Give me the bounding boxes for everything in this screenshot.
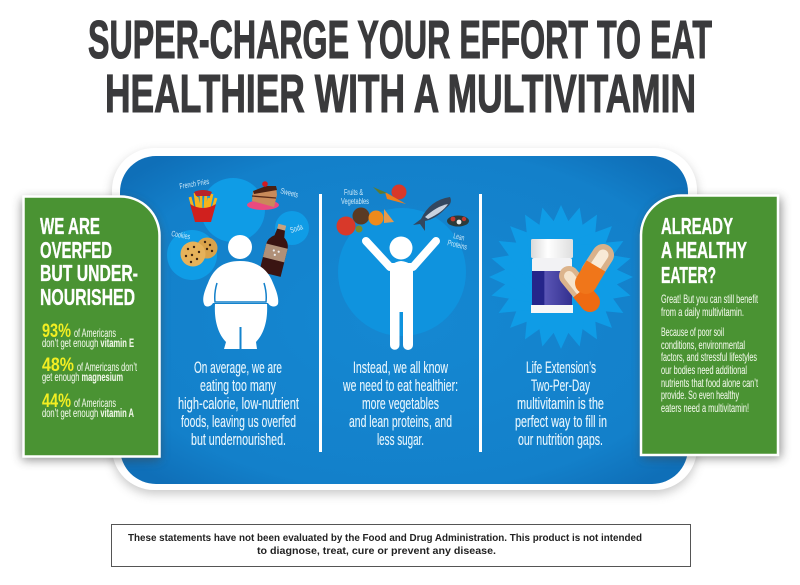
food labels: Fruits & — [344, 188, 363, 197]
food labels — [341, 188, 468, 252]
heading: EATER? — [661, 262, 716, 288]
text: multivitamin caption: multivitamin is the — [517, 394, 604, 413]
icon: fish — [413, 197, 451, 231]
panel: left green callout — [22, 196, 160, 460]
heading: NOURISHED — [40, 284, 135, 310]
text: explanation: provide. So even healthy — [661, 388, 739, 402]
text: benefit intro: from a daily multivitamin. — [661, 305, 744, 319]
heading: A HEALTHY — [661, 237, 747, 263]
icon: soda bottle — [259, 222, 293, 277]
food labels: Vegetables — [341, 197, 369, 206]
stat: vitamin A: 44% — [42, 391, 71, 412]
icon: cookies — [180, 238, 218, 266]
disclaimer box: to diagnose, treat, cure or prevent any disease. — [257, 545, 496, 557]
panel: multivitamin column — [482, 198, 640, 449]
food labels: Sweets — [279, 186, 299, 200]
icon: cake — [247, 181, 279, 210]
stat: magnesium: of Americans don’t — [77, 360, 137, 374]
text: healthy caption: more vegetables — [362, 394, 439, 413]
stat: vitamin A: don’t get enough vitamin A — [42, 406, 134, 420]
title — [88, 10, 712, 124]
icon: french fries — [190, 190, 216, 222]
divider lines — [319, 194, 482, 452]
text: explanation — [661, 325, 758, 415]
panel: healthy eating column — [336, 184, 469, 449]
food labels: Cookies — [171, 229, 191, 241]
text: multivitamin caption: Two-Per-Day — [531, 376, 590, 395]
starburst — [482, 198, 640, 356]
food labels: French Fries — [179, 177, 210, 191]
disclaimer box: These statements have not been evaluated by the Food and Drug Administration. This product is not intended — [128, 532, 642, 544]
stat: vitamin E — [42, 321, 134, 350]
food labels: Soda — [289, 222, 304, 235]
icon: healthy person — [366, 236, 436, 350]
stat: magnesium: 48% — [42, 355, 74, 376]
icon: vitamin bottle — [531, 239, 573, 313]
text: healthy caption: and lean proteins, and — [349, 412, 452, 431]
panel: blue main board — [112, 148, 697, 494]
panel: overfed column — [167, 177, 309, 449]
text: multivitamin caption: perfect way to fill in — [515, 412, 607, 431]
stat: magnesium — [42, 355, 137, 384]
text: multivitamin caption — [515, 358, 607, 449]
heading: ALREADY — [661, 213, 733, 239]
stat: vitamin A: of Americans — [74, 396, 116, 410]
text: healthy caption — [342, 358, 458, 449]
text: overfed caption: eating too many — [200, 376, 276, 395]
text: benefit intro — [661, 292, 758, 319]
food labels: Lean — [453, 231, 465, 243]
text: overfed caption: but undernourished. — [191, 430, 286, 449]
icon: capsules — [569, 255, 603, 312]
food labels: Proteins — [447, 238, 468, 252]
stat: vitamin E: don’t get enough vitamin E — [42, 336, 134, 350]
text: healthy caption: Instead, we all know — [353, 358, 448, 377]
heading — [40, 213, 138, 310]
stat: vitamin E: of Americans — [74, 326, 116, 340]
light blue bubbles behind food — [167, 178, 309, 280]
light blue circle — [338, 208, 466, 336]
text: multivitamin caption: our nutrition gaps. — [518, 430, 603, 449]
heading — [661, 213, 747, 288]
text: overfed caption: On average, we are — [194, 358, 282, 377]
text: overfed caption: high-calorie, low-nutrient — [178, 394, 299, 413]
stat: vitamin A — [42, 391, 134, 420]
disclaimer box — [112, 524, 690, 566]
text: overfed caption — [178, 358, 299, 449]
icon: overfed person — [203, 235, 278, 349]
text: explanation: our bodies need additional — [661, 363, 747, 377]
heading: BUT UNDER- — [40, 260, 138, 286]
text: healthy caption: we need to eat healthier: — [342, 376, 458, 395]
heading: WE ARE — [40, 213, 100, 239]
food labels — [171, 177, 304, 241]
text: overfed caption: foods, leaving us overfed — [181, 412, 296, 431]
icon: fruits and vegetables — [336, 184, 406, 236]
stat: vitamin E: 93% — [42, 321, 71, 342]
text: multivitamin caption: Life Extension’s — [526, 358, 596, 377]
stat: magnesium: get enough magnesium — [42, 370, 123, 384]
text: explanation: conditions, environmental — [661, 338, 745, 352]
icon: protein bowl — [447, 216, 469, 226]
text: explanation: Because of poor soil — [661, 325, 724, 339]
panel: right green callout — [641, 195, 781, 458]
text: healthy caption: less sugar. — [377, 430, 424, 449]
heading: OVERFED — [40, 237, 112, 263]
